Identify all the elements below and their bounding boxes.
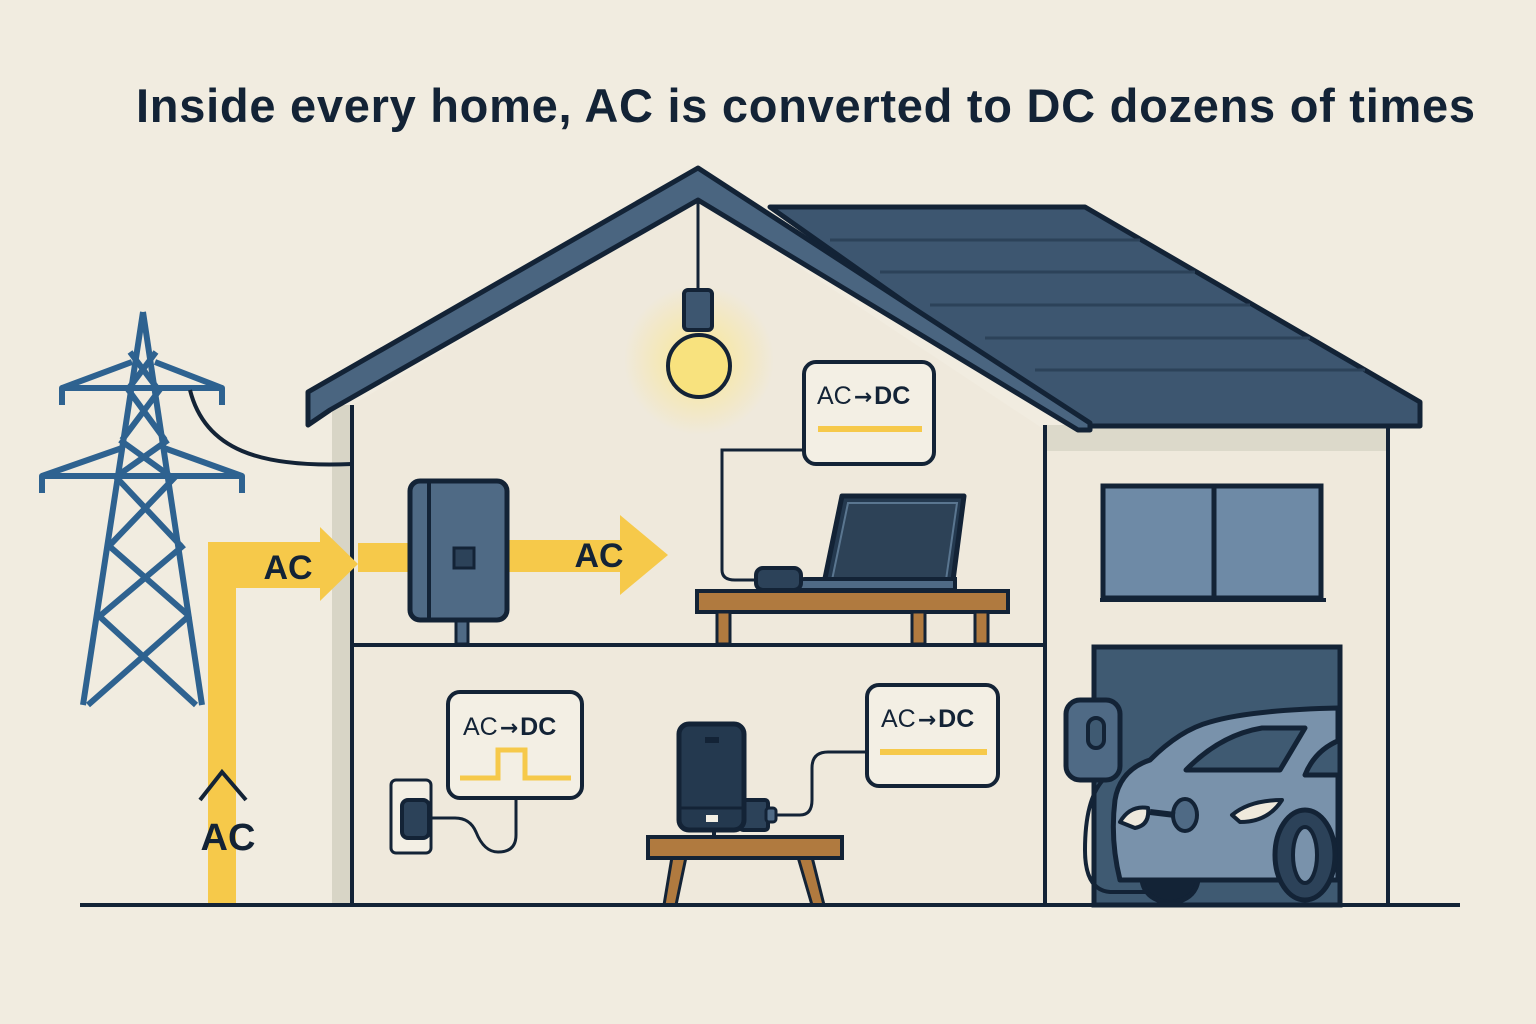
AC flow arrows: AC [263, 549, 313, 587]
electrical panel [410, 481, 507, 644]
AC flow arrows [200, 515, 668, 905]
garage [1045, 425, 1388, 905]
AC flow arrows: AC [201, 817, 255, 859]
power tower [42, 312, 242, 705]
title: Inside every home, AC is converted to DC dozens of times [136, 79, 1475, 132]
ground line [80, 903, 1460, 907]
callout: phone AC->DC [776, 685, 998, 815]
house wall fill [352, 200, 1045, 905]
callout: phone AC->DC: AC→DC [881, 705, 974, 733]
callout: outlet AC->DC [415, 692, 582, 852]
callout: laptop AC->DC [722, 362, 934, 580]
light bulb [624, 200, 774, 435]
callout: laptop AC->DC: AC→DC [817, 382, 910, 410]
wire [190, 390, 352, 465]
laptop on desk [697, 496, 1008, 644]
phone on table [648, 724, 842, 905]
callout: outlet AC->DC: AC→DC [463, 713, 556, 741]
charger [1066, 700, 1150, 892]
garage window [1100, 486, 1326, 600]
wall outlet with plug [391, 780, 431, 853]
garage door with EV and charger [1066, 647, 1340, 905]
roof gable [308, 168, 1090, 430]
house [308, 168, 1420, 905]
car [1113, 708, 1340, 903]
roof right [770, 207, 1420, 426]
AC flow arrows: AC [574, 537, 624, 575]
